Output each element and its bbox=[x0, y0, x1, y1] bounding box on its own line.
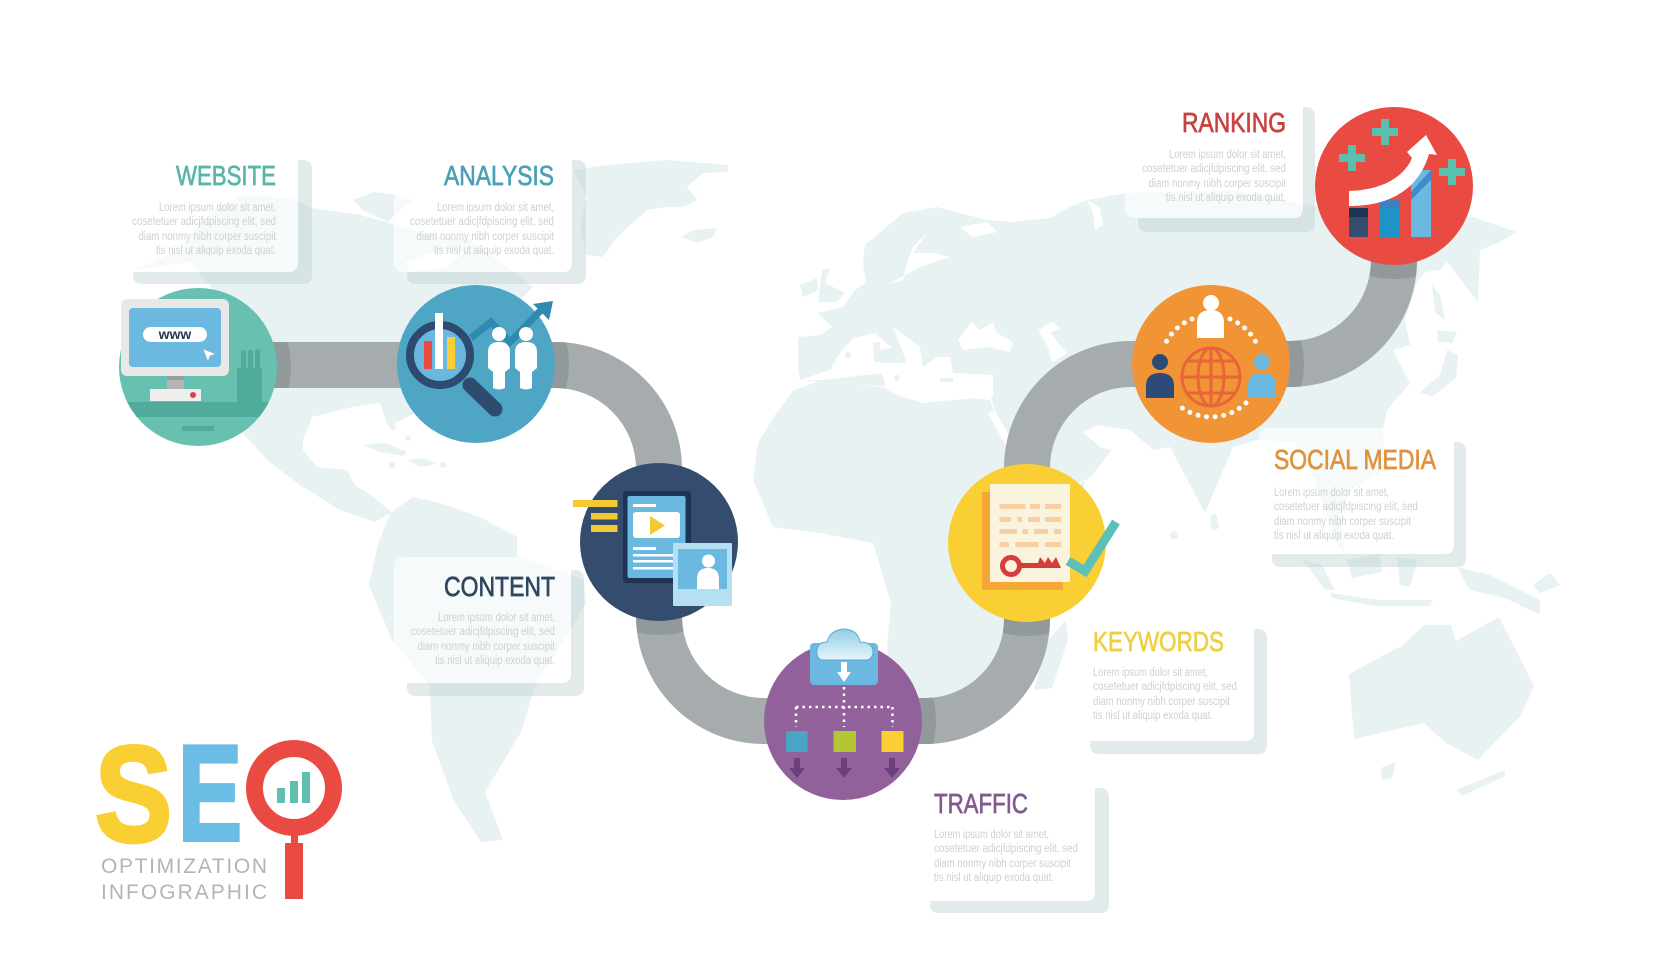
icon: social media globe and people bbox=[1132, 285, 1290, 443]
panel: content card: diam nonmy nibh corper suscipit bbox=[418, 641, 556, 653]
panel: social media card bbox=[1259, 428, 1466, 567]
panel: analysis card: Lorem ipsum dolor sit amet, bbox=[437, 202, 554, 214]
panel: traffic card: diam nonmy nibh corper suscipit bbox=[934, 858, 1072, 870]
panel: analysis card: cosetetuer adicjfdpiscing elit, sed bbox=[410, 216, 554, 228]
panel: traffic card: cosetetuer adicjfdpiscing elit, sed bbox=[934, 843, 1078, 855]
panel: keywords card: KEYWORDS bbox=[1093, 626, 1224, 657]
panel: traffic card: Lorem ipsum dolor sit amet, bbox=[934, 829, 1049, 841]
icon: content tablet bbox=[573, 463, 738, 621]
panel: content card bbox=[394, 557, 584, 696]
panel: traffic card: TRAFFIC bbox=[934, 788, 1028, 819]
icon: keywords document bbox=[948, 464, 1116, 622]
icon: website computer bbox=[119, 288, 277, 446]
panel: ranking card: Lorem ipsum dolor sit amet, bbox=[1169, 149, 1286, 161]
panel: website card bbox=[120, 146, 312, 284]
connecting road path bbox=[273, 262, 1417, 744]
title: SEO logo: E bbox=[178, 717, 242, 869]
title: SEO logo bbox=[95, 717, 334, 904]
panel: website card: diam nonmy nibh corper suscipit bbox=[138, 231, 277, 243]
panel: ranking card bbox=[1125, 92, 1315, 232]
panel: traffic card: tis nisl ut aliquip exoda quat. bbox=[934, 872, 1054, 884]
icon: traffic cloud hierarchy bbox=[764, 629, 922, 800]
panel: social media card: SOCIAL MEDIA bbox=[1274, 444, 1436, 475]
title: SEO logo: INFOGRAPHIC bbox=[101, 881, 267, 904]
panel: keywords card bbox=[1077, 615, 1267, 754]
panel: analysis card: tis nisl ut aliquip exoda quat. bbox=[434, 245, 554, 257]
panel: social media card: tis nisl ut aliquip exoda quat. bbox=[1274, 530, 1394, 542]
panel: ranking card: tis nisl ut aliquip exoda quat. bbox=[1166, 192, 1286, 204]
panel: website card: WEBSITE bbox=[176, 160, 276, 191]
world map background bbox=[135, 160, 1560, 842]
icon: analysis magnifier bbox=[397, 285, 555, 443]
panel: content card: tis nisl ut aliquip exoda quat. bbox=[435, 655, 555, 667]
panel: content card: cosetetuer adicjfdpiscing elit, sed bbox=[411, 626, 555, 638]
panel: ranking card: diam nonmy nibh corper suscipit bbox=[1148, 178, 1287, 190]
panel: keywords card: cosetetuer adicjfdpiscing elit, sed bbox=[1093, 681, 1237, 693]
panel: ranking card: RANKING bbox=[1182, 107, 1286, 138]
panel: keywords card: diam nonmy nibh corper suscipit bbox=[1093, 696, 1231, 708]
panel: analysis card: diam nonmy nibh corper suscipit bbox=[416, 231, 555, 243]
panel: keywords card: Lorem ipsum dolor sit amet, bbox=[1093, 667, 1208, 679]
title: SEO logo: OPTIMIZATION bbox=[101, 855, 267, 878]
panel: ranking card: cosetetuer adicjfdpiscing elit, sed bbox=[1142, 163, 1286, 175]
panel: traffic card bbox=[917, 775, 1109, 913]
panel: website card: cosetetuer adicjfdpiscing elit, sed bbox=[132, 216, 276, 228]
icon: website computer: www bbox=[158, 326, 191, 342]
icon: logo magnifier bbox=[254, 748, 334, 899]
panel: analysis card bbox=[394, 146, 586, 284]
icon: ranking growth chart bbox=[1315, 107, 1473, 265]
panel: social media card: diam nonmy nibh corper suscipit bbox=[1274, 516, 1412, 528]
panel: social media card: Lorem ipsum dolor sit amet, bbox=[1274, 487, 1389, 499]
panel: content card: Lorem ipsum dolor sit amet, bbox=[438, 612, 555, 624]
panel: analysis card: ANALYSIS bbox=[444, 160, 554, 191]
panel: content card: CONTENT bbox=[444, 571, 555, 602]
panel: website card: tis nisl ut aliquip exoda quat. bbox=[156, 245, 276, 257]
panel: website card: Lorem ipsum dolor sit amet, bbox=[159, 202, 276, 214]
panel: social media card: cosetetuer adicjfdpiscing elit, sed bbox=[1274, 501, 1418, 513]
title: SEO logo: S bbox=[95, 718, 172, 870]
panel: keywords card: tis nisl ut aliquip exoda quat. bbox=[1093, 710, 1213, 722]
